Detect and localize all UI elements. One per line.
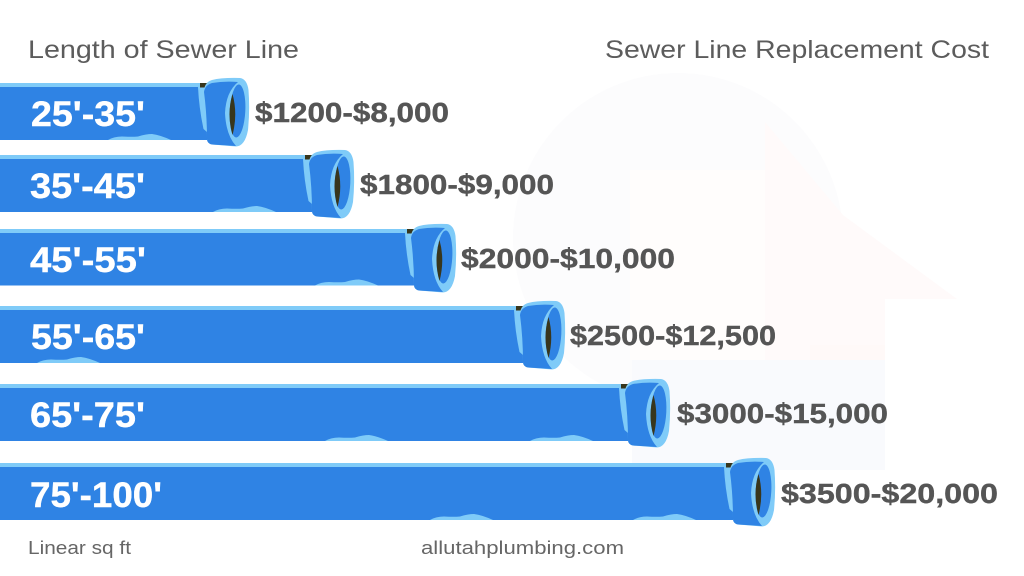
price: 25-35 ft: $1200-$8,000 [255, 97, 449, 128]
label: 45-55 ft: 45'-55' [30, 241, 146, 280]
pipe bar: 65-75 ft [0, 379, 670, 448]
pipe bar: 75-100 ft [0, 458, 775, 526]
label: 65-75 ft: 65'-75' [30, 396, 145, 435]
pipe bar: 55-65 ft [0, 301, 565, 370]
price: 75-100 ft: $3500-$20,000 [781, 478, 998, 509]
label: 55-65 ft: 55'-65' [31, 318, 145, 357]
heading: length of sewer line: Length of Sewer Line [28, 36, 299, 64]
label: 75-100 ft: 75'-100' [30, 476, 162, 515]
pipe bar: 25-35 ft [0, 78, 249, 146]
price: 45-55 ft: $2000-$10,000 [461, 243, 675, 274]
heading: sewer line replacement cost: Sewer Line Replacement Cost [605, 36, 989, 64]
price: 55-65 ft: $2500-$12,500 [570, 320, 776, 351]
label: 35-45 ft: 35'-45' [30, 167, 145, 206]
pipe bar: 45-55 ft [0, 224, 456, 292]
price: 65-75 ft: $3000-$15,000 [677, 398, 888, 429]
background watermark: house and circle [513, 73, 957, 470]
pipe bar: 35-45 ft [0, 150, 354, 218]
price: 35-45 ft: $1800-$9,000 [360, 169, 554, 200]
footer note: units: Linear sq ft [28, 538, 131, 558]
footer: website: allutahplumbing.com [421, 538, 624, 558]
label: 25-35 ft: 25'-35' [31, 95, 145, 134]
